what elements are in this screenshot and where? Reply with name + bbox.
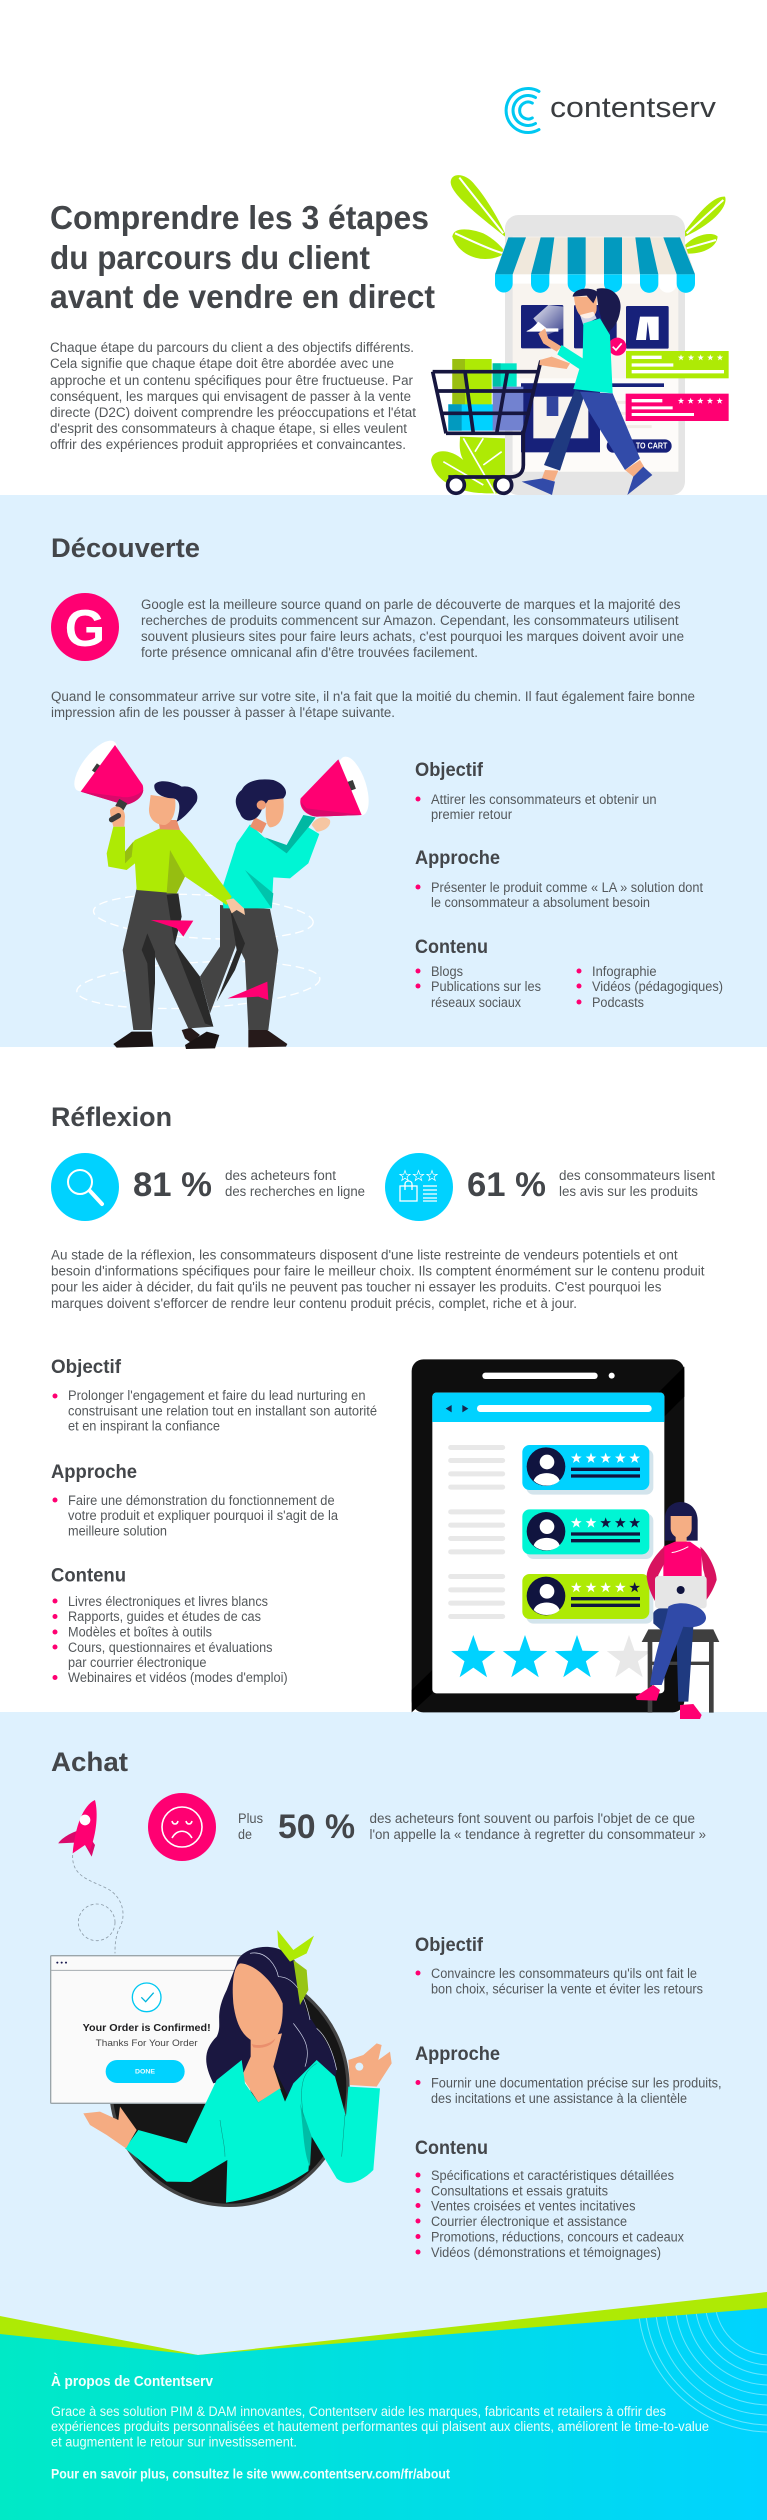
block: objectif xyxy=(415,1935,703,1996)
intro text block: approche et un contenu spécifiques pour être fructueuse. Par xyxy=(50,373,413,388)
block: contenu: Promotions, réductions, concours et cadeaux xyxy=(431,2230,684,2244)
intro text block: offrir des expériences produit appropriées et convaincantes. xyxy=(50,437,406,452)
heading: achat: Achat xyxy=(51,1747,128,1777)
block: objectif: Prolonger l'engagement et faire du lead nurturing en xyxy=(68,1388,366,1403)
icon: google G xyxy=(51,593,119,661)
review card: four white stars xyxy=(522,1574,653,1624)
title: avant de vendre en direct xyxy=(50,278,435,315)
text block: impression: Quand le consommateur arrive sur votre site, il n'a fait que la moitié du chemin. Il faut également faire bonne xyxy=(51,689,695,704)
block: contenu xyxy=(415,937,723,1010)
stat: 50 %: 50 % xyxy=(278,1808,355,1846)
block: contenu: Blogs xyxy=(431,964,463,979)
block: objectif: Objectif xyxy=(51,1357,122,1378)
block: objectif xyxy=(415,760,657,822)
stat: 81 % xyxy=(51,1153,365,1221)
block: contenu: par courrier électronique xyxy=(68,1655,206,1670)
woman xyxy=(83,1930,392,2203)
block: objectif: construisant une relation tout en installant son autorité xyxy=(68,1404,377,1418)
block: contenu: Podcasts xyxy=(592,995,644,1010)
block: approche xyxy=(415,2044,722,2106)
block: contenu: Publications sur les xyxy=(431,979,541,994)
logo: contentserv xyxy=(506,89,717,133)
block: contenu: Rapports, guides et études de cas xyxy=(68,1609,261,1624)
illustration: two people with megaphones xyxy=(67,734,375,1049)
block: contenu xyxy=(51,1566,288,1685)
text block: google: souvent plusieurs sites pour faire leurs achats, c'est pourquoi les marques doivent avoir une xyxy=(141,629,684,644)
panel: découverte xyxy=(51,533,723,1049)
block: contenu: Vidéos (démonstrations et témoignages) xyxy=(431,2245,661,2260)
panel background: achat xyxy=(0,1712,767,2520)
block: approche: le consommateur a absolument besoin xyxy=(431,895,650,910)
stat: 50 %: l'on appelle la « tendance à regretter du consommateur » xyxy=(370,1827,706,1842)
intro text block: conséquent, les marques qui envisagent de passer à la vente xyxy=(50,389,411,404)
footer: about text xyxy=(51,2404,709,2450)
footer: about text: expériences produits personnalisées et hautement performantes qui plaisent aux clients, améliorent le time-to-value xyxy=(51,2419,709,2434)
block: approche: Approche xyxy=(415,848,500,869)
text block: impression xyxy=(51,689,695,720)
block: approche xyxy=(415,848,703,910)
block: contenu: Modèles et boîtes à outils xyxy=(68,1624,212,1640)
intro text block: Chaque étape du parcours du client a des objectifs différents. xyxy=(50,340,414,355)
stat: 50 % xyxy=(148,1793,706,1861)
logo: contentserv: contentserv xyxy=(550,92,717,124)
footer: concentric arcs xyxy=(638,2312,767,2432)
illustration: rocket, order confirmation and woman xyxy=(51,1800,392,2205)
text block: réflexion intro xyxy=(51,1248,705,1311)
block: contenu: Vidéos (pédagogiques) xyxy=(592,979,723,994)
block: approche: votre produit et expliquer pourquoi il s'agit de la xyxy=(68,1508,338,1523)
text block: google: Google est la meilleure source quand on parle de découverte de marques et la majorité des xyxy=(141,597,681,612)
review card: two white stars xyxy=(522,1509,653,1559)
text block: impression: impression afin de les pousser à passer à l'étape suivante. xyxy=(51,705,395,720)
rocket with dashed trail xyxy=(58,1800,123,1953)
circle behind woman xyxy=(111,1968,348,2205)
footer: gradient panel xyxy=(0,2308,767,2520)
illustration: shop and woman with cart: O TO CART xyxy=(628,441,668,451)
block: approche xyxy=(51,1462,338,1538)
block: contenu xyxy=(415,2138,684,2260)
stat: 61 %: les avis sur les produits xyxy=(559,1184,698,1199)
text block: réflexion intro: pour les aider à décider, du fait qu'ils ne peuvent pas toucher ni essayer les produits. C'est pourquoi les xyxy=(51,1280,662,1294)
block: contenu: Courrier électronique et assistance xyxy=(431,2214,627,2229)
block: approche: Approche xyxy=(415,2044,500,2065)
stat: 61 %: des consommateurs lisent xyxy=(559,1168,715,1183)
text block: google: forte présence omnicanal afin d'être trouvées facilement. xyxy=(141,645,478,660)
block: contenu: Livres électroniques et livres blancs xyxy=(68,1594,268,1609)
footer: lime band xyxy=(0,2292,767,2356)
block: approche: Présenter le produit comme « LA » solution dont xyxy=(431,880,703,895)
footer: about text: Grace à ses solution PIM & DAM innovantes, Contentserv aide les marques, fabricants et retailers à offrir des xyxy=(51,2404,666,2419)
panel: achat xyxy=(51,1747,722,2260)
order confirmation window: Thanks For Your Order xyxy=(96,2038,198,2048)
review card: five white stars xyxy=(522,1445,653,1495)
block: contenu: Webinaires et vidéos (modes d'emploi) xyxy=(68,1670,288,1685)
block: contenu: Ventes croisées et ventes incitatives xyxy=(431,2198,636,2214)
block: contenu: réseaux sociaux xyxy=(431,995,521,1010)
block: approche: des incitations et une assistance à la clientèle xyxy=(431,2091,687,2106)
title: du parcours du client xyxy=(50,239,370,276)
panel: réflexion xyxy=(51,1102,719,1719)
block: contenu: Consultations et essais gratuits xyxy=(431,2184,608,2198)
block: approche: Approche xyxy=(51,1462,137,1483)
block: contenu: Cours, questionnaires et évaluations xyxy=(68,1640,273,1655)
stat: 81 %: des recherches en ligne xyxy=(225,1184,365,1199)
block: contenu: Contenu xyxy=(415,2138,488,2159)
block: objectif: Objectif xyxy=(415,760,484,781)
block: approche: meilleure solution xyxy=(68,1524,167,1538)
icon: google G: G xyxy=(65,600,105,658)
stat: 81 %: 81 % xyxy=(133,1166,212,1204)
seated woman with laptop xyxy=(636,1502,719,1719)
block: objectif: Attirer les consommateurs et obtenir un xyxy=(431,792,657,807)
large star rating xyxy=(451,1635,651,1677)
block: contenu: Spécifications et caractéristiques détaillées xyxy=(431,2168,674,2183)
text block: google: recherches de produits commencent sur Amazon. Cependant, les consommateurs utilisent xyxy=(141,613,679,628)
block: objectif: et en inspirant la confiance xyxy=(68,1418,220,1434)
stat: 50 %: des acheteurs font souvent ou parfois l'objet de ce que xyxy=(370,1811,695,1826)
block: objectif: premier retour xyxy=(431,807,512,822)
stat: 61 %: 61 % xyxy=(467,1166,546,1204)
illustration: shop and woman with cart xyxy=(431,175,729,495)
panel background: découverte xyxy=(0,495,767,1047)
text block: réflexion intro: Au stade de la réflexion, les consommateurs disposent d'une liste restreinte de vendeurs potentiels et ont xyxy=(51,1248,678,1262)
block: objectif: Objectif xyxy=(415,1935,484,1956)
block: contenu: Contenu xyxy=(51,1566,126,1586)
footer xyxy=(0,2292,767,2520)
heading: réflexion: Réflexion xyxy=(51,1102,172,1132)
intro text block: directe (D2C) doivent comprendre les préoccupations et l'état xyxy=(50,405,416,420)
intro text block xyxy=(50,340,416,452)
heading: découverte: Découverte xyxy=(51,533,200,563)
stat: 50 %: de xyxy=(238,1827,252,1842)
stat: 81 %: des acheteurs font xyxy=(225,1168,336,1183)
order confirmation window xyxy=(51,1956,251,2103)
stat: 50 %: Plus xyxy=(238,1811,263,1826)
block: approche: Fournir une documentation précise sur les produits, xyxy=(431,2076,722,2090)
text block: google xyxy=(141,597,684,660)
block: contenu: Infographie xyxy=(592,964,657,979)
text block: réflexion intro: marques doivent s'efforcer de rendre leur contenu produit précis, complet, riche et à jour. xyxy=(51,1296,577,1311)
order confirmation window: DONE xyxy=(135,2069,156,2076)
order confirmation window: Your Order is Confirmed! xyxy=(83,2023,211,2034)
footer: about text: et augmentent le retour sur investissement. xyxy=(51,2434,297,2450)
block: contenu: Contenu xyxy=(415,937,488,958)
block: objectif: bon choix, sécuriser la vente et éviter les retours xyxy=(431,1982,703,1996)
block: objectif xyxy=(51,1357,377,1434)
intro text block: d'esprit des consommateurs à chaque étape, si elles veulent xyxy=(50,421,407,436)
footer: about heading: À propos de Contentserv xyxy=(51,2373,214,2390)
illustration: tablet with reviews and seated woman xyxy=(412,1359,719,1719)
intro text block: Cela signifie que chaque étape doit être abordée avec une xyxy=(50,356,394,371)
title: Comprendre les 3 étapes xyxy=(50,199,429,236)
title xyxy=(50,199,435,315)
block: approche: Faire une démonstration du fonctionnement de xyxy=(68,1493,335,1508)
block: objectif: Convaincre les consommateurs qu'ils ont fait le xyxy=(431,1966,697,1981)
text block: réflexion intro: besoin d'informations spécifiques pour faire le meilleur choix. Ils comptent énormément sur le contenu produit xyxy=(51,1264,705,1278)
footer: link: Pour en savoir plus, consultez le site www.contentserv.com/fr/about xyxy=(51,2466,450,2482)
stat: 61 % xyxy=(385,1153,715,1221)
